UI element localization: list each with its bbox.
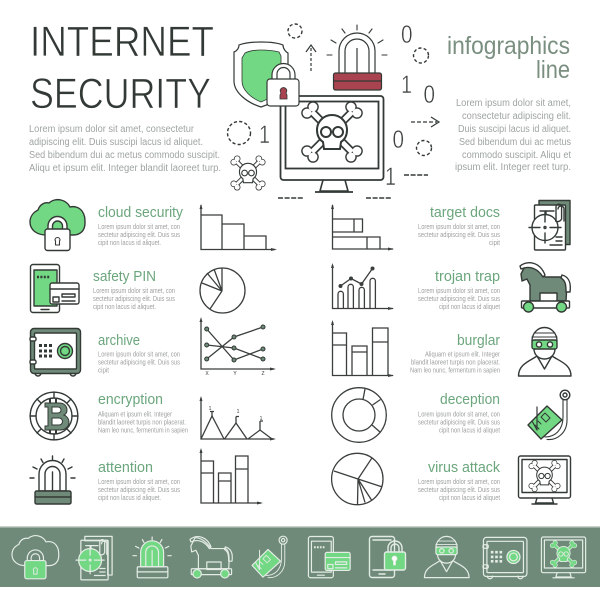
description	[98, 222, 180, 247]
icon: alarm beacon	[327, 25, 387, 90]
right intro text block: Sed bibendum dui ac metus	[459, 137, 571, 148]
subtitle: line	[536, 56, 570, 84]
description: Aliquam et ipsum elit. Integer	[98, 410, 172, 418]
title	[30, 18, 214, 118]
subtitle	[447, 32, 570, 84]
binary digits: 0	[401, 21, 412, 49]
description: cipit	[489, 238, 500, 247]
icon: phone and card	[30, 264, 79, 312]
chart: line chart: Y	[233, 371, 237, 377]
description: Nam leo nunc, fermentum in sapien	[410, 366, 500, 374]
strip icon: phone and lock	[370, 536, 406, 578]
description	[98, 477, 180, 502]
panel: archive	[30, 328, 180, 376]
icon: padlock	[267, 64, 299, 106]
description: sectetur adipiscing elit. Duis sus	[418, 294, 500, 303]
icon: bitcoin coin	[30, 392, 78, 440]
description	[98, 410, 188, 434]
right intro text block	[455, 98, 571, 173]
icon: trojan horse	[520, 263, 570, 312]
chart: triangle chart: 1	[260, 416, 263, 422]
intro text block: adipiscing elit. Duis suscipi lacus id aliquet.	[29, 137, 203, 148]
strip icon: cloud	[12, 536, 59, 579]
subtitle: infographics	[447, 32, 570, 60]
right intro text block: consectetur adipiscing elit.	[462, 111, 571, 122]
strip icon: monitor	[541, 537, 586, 578]
description: sectetur adipiscing elit. Duis sus	[98, 485, 180, 494]
chart: step bars	[200, 204, 277, 251]
description	[93, 286, 175, 311]
heading: target docs: target docs	[430, 204, 500, 221]
chart: triangle chart: 1	[209, 406, 212, 412]
chart: pie two	[332, 453, 383, 505]
dashes	[278, 175, 428, 198]
icon: cloud security	[30, 200, 85, 250]
title: SECURITY	[30, 70, 211, 118]
strip icon: alarm	[133, 537, 171, 578]
description: cipit non lacus id aliquet.	[93, 302, 156, 311]
panel: safety PIN	[30, 264, 175, 312]
panel: icon strip	[0, 526, 600, 587]
intro text block: Aliqu et ipsum elit. Integer blandit laoreet turp.	[29, 163, 221, 174]
description	[418, 222, 500, 247]
description: cipit	[98, 366, 109, 374]
strip icon: phone and card	[308, 536, 350, 578]
description: cipit non lacus id aliquet.	[98, 238, 161, 247]
binary digits: 0	[392, 126, 404, 154]
description: Lorem ipsum dolor sit amet, con	[98, 222, 180, 231]
panel: attention	[30, 456, 180, 504]
heading: safety PIN: safety PIN	[93, 268, 156, 285]
chart: triangle chart: 1	[237, 409, 240, 415]
panel: burglar	[410, 328, 571, 376]
description: sectetur adipiscing elit. Duis sus	[98, 230, 180, 239]
panel: virus attack	[418, 456, 570, 504]
chart: tall bars	[331, 320, 394, 377]
icon: small skull	[230, 155, 266, 191]
chart: line chart: X	[205, 371, 209, 377]
icon: monitor with skull	[280, 96, 384, 192]
binary digits: 1	[385, 163, 396, 191]
description	[418, 286, 500, 311]
icon: burglar	[518, 328, 571, 376]
description: blandit laoreet turpis non placerat.	[411, 358, 500, 366]
intro text block: Lorem ipsum dolor sit amet, consectetur	[29, 124, 195, 135]
description: sectetur adipiscing elit. Duis sus	[418, 485, 500, 494]
icon: infected monitor	[518, 456, 570, 504]
icon: target document	[529, 200, 570, 250]
description: Lorem ipsum dolor sit amet, con	[98, 477, 180, 486]
icon: shield	[234, 42, 288, 107]
arrow up	[306, 45, 316, 71]
icon: alarm beacon	[30, 456, 75, 504]
chart: line chart: Z	[261, 371, 265, 377]
description: Aliquam et ipsum elit. Integer	[425, 350, 500, 358]
description	[418, 477, 500, 502]
strip icon: burglar	[424, 536, 469, 578]
right intro text block: commodo suscipit. Aliqu et	[462, 150, 571, 161]
panel: deception	[418, 390, 570, 440]
strip icon: hook	[252, 536, 287, 578]
strip icon: safe	[483, 537, 527, 579]
binary digits: 0	[424, 81, 435, 109]
description	[410, 350, 500, 374]
description: cipit non lacus id aliquet	[439, 426, 500, 434]
chart: line chart	[200, 317, 276, 377]
chart: stacked bars	[200, 448, 263, 504]
description: cipit non lacus id aliquet.	[98, 493, 161, 502]
binary digits: 1	[259, 121, 270, 149]
hero illustration	[228, 21, 439, 198]
heading: cloud security: cloud security	[98, 204, 183, 221]
chart: pie	[200, 268, 245, 313]
description: Lorem ipsum dolor sit amet, con	[418, 286, 500, 295]
description	[98, 350, 180, 374]
strip icon: document	[76, 536, 112, 580]
description: blandit laoreet turpis non placerat.	[98, 418, 186, 426]
dashed circles	[228, 24, 432, 156]
strip icon: horse	[190, 537, 232, 578]
title: INTERNET	[30, 18, 214, 66]
heading: encryption: encryption	[98, 391, 163, 408]
chart: donut	[332, 388, 386, 442]
panel: cloud security	[30, 200, 183, 250]
description: Lorem ipsum dolor sit amet, con	[418, 222, 500, 231]
chart: bars with trend line	[331, 263, 394, 310]
description: Lorem ipsum dolor sit amet, con	[418, 410, 500, 418]
arrow right	[411, 117, 439, 127]
description: sectetur adipiscing elit. Duis sus	[98, 358, 180, 366]
intro text block	[29, 124, 221, 174]
right intro text block: Lorem ipsum dolor sit amet,	[456, 98, 571, 109]
icon: safe	[30, 328, 80, 376]
heading: trojan trap: trojan trap	[435, 268, 500, 285]
description	[418, 410, 500, 434]
description: cipit non lacus id aliquet	[439, 302, 500, 311]
panel: target docs	[418, 200, 570, 250]
icon: hook and card	[528, 390, 570, 440]
description: cipit non lacus id aliquet	[439, 493, 500, 502]
description: Nam leo nunc, fermentum in sapien	[98, 426, 188, 434]
heading: deception: deception	[440, 391, 500, 408]
binary digits	[259, 21, 435, 191]
description: sectetur adipiscing elit. Duis sus	[93, 294, 175, 303]
panel: encryption	[30, 391, 188, 440]
right intro text block: Duis suscipi lacus id aliquet.	[458, 124, 571, 135]
heading: burglar: burglar	[457, 332, 500, 349]
chart: triangle chart	[200, 396, 276, 440]
description: sectetur adipiscing elit. Duis sus	[418, 230, 500, 239]
heading: attention: attention	[98, 459, 153, 476]
strip icons	[12, 536, 586, 580]
description: Lorem ipsum dolor sit amet, con	[93, 286, 175, 295]
description: Lorem ipsum dolor sit amet, con	[418, 477, 500, 486]
chart: horizontal bars	[331, 204, 394, 250]
panel: trojan trap	[418, 263, 570, 312]
intro text block: Sed bibendum dui ac metus commodo suscipit.	[29, 150, 220, 161]
heading: archive: archive	[98, 332, 140, 349]
description: Lorem ipsum dolor sit amet, con	[98, 350, 180, 358]
right intro text block: ipsum elit. Integer reet turp.	[455, 162, 571, 173]
heading: virus attack: virus attack	[428, 459, 500, 476]
binary digits: 1	[401, 71, 412, 99]
description: sectetur adipiscing elit. Duis sus	[418, 418, 500, 426]
